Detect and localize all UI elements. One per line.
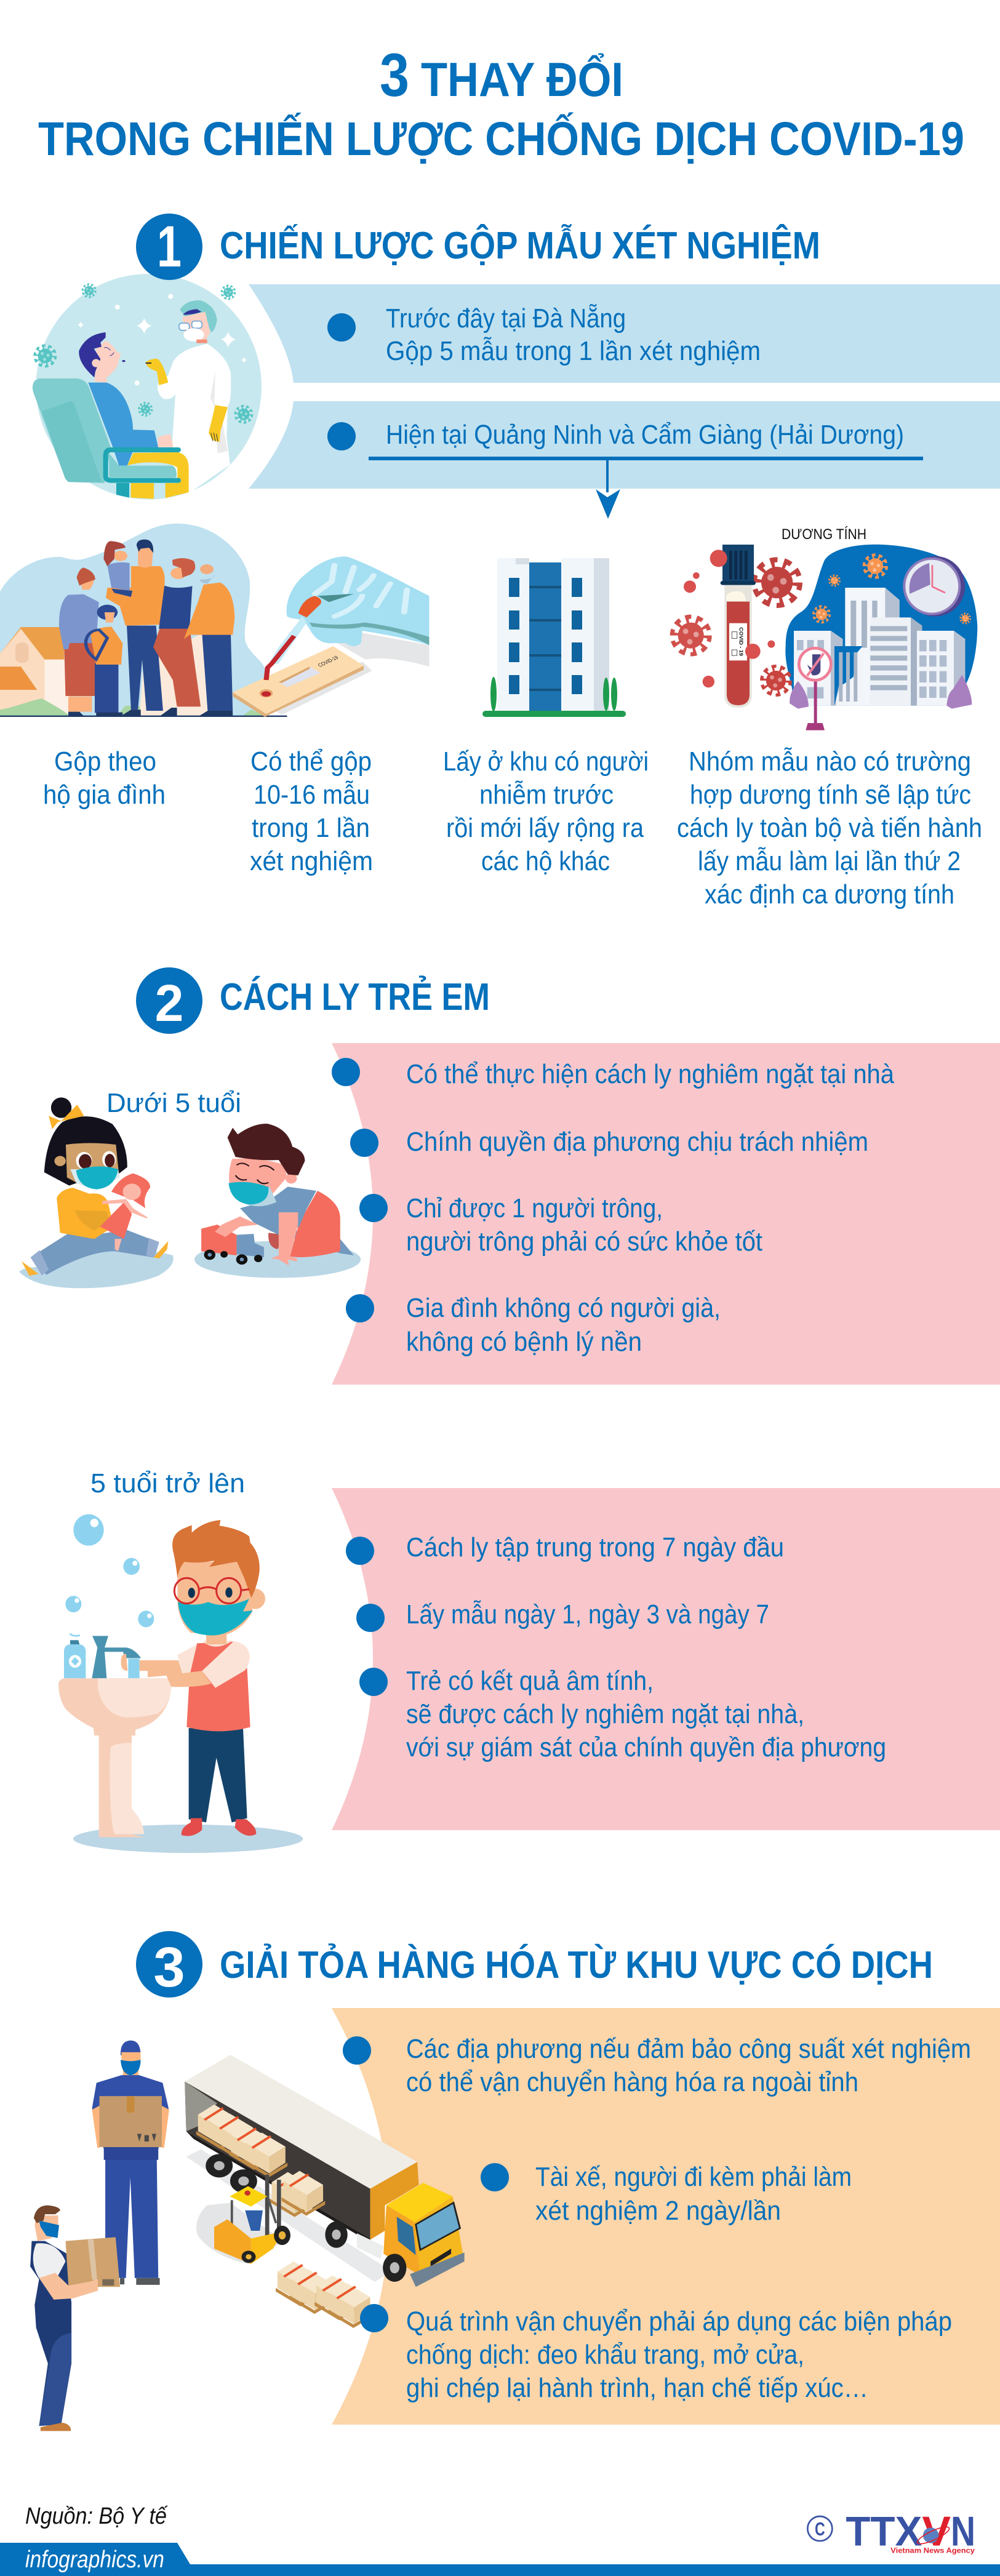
panel: under 5: Chỉ được 1 người trông,	[406, 1193, 663, 1223]
captions: pooling methods: 10-16 mẫu	[254, 780, 370, 810]
illustration: swab test	[33, 274, 262, 500]
panel: goods transport: chống dịch: đeo khẩu trang, mở cửa,	[406, 2340, 804, 2370]
captions: pooling methods: Nhóm mẫu nào có trường	[689, 746, 971, 777]
title: THAY ĐỔI	[421, 52, 623, 106]
captions: pooling methods: xác định ca dương tính	[705, 879, 954, 910]
illustration: apartment building	[482, 558, 626, 717]
panel: under 5: Có thể thực hiện cách ly nghiêm ngặt tại nhà	[406, 1059, 894, 1089]
heading 2: CÁCH LY TRẺ EM	[220, 976, 490, 1018]
logo: TTXVN: N	[951, 2509, 975, 2555]
title: 3	[380, 41, 409, 109]
illustration: workers and truck	[30, 2041, 465, 2431]
panel: under 5	[332, 1043, 1000, 1385]
number badge 1	[136, 214, 202, 280]
panel: 5 and up: với sự giám sát của chính quyền địa phương	[406, 1732, 886, 1762]
panel: before: Trước đây tại Đà Nẵng	[386, 303, 626, 334]
number badge 1: 1	[157, 214, 182, 279]
label: COVID-19 on kit: COVID-19	[317, 655, 340, 668]
captions: pooling methods: lấy mẫu làm lại lần thứ 2	[698, 846, 961, 876]
panel: before: Gộp 5 mẫu trong 1 lần xét nghiệm	[386, 336, 761, 366]
logo: TTXVN: Vietnam News Agency	[890, 2546, 975, 2554]
captions: pooling methods: trong 1 lần	[252, 813, 370, 843]
panel: 5 and up: Trẻ có kết quả âm tính,	[406, 1666, 654, 1696]
captions: pooling methods: nhiễm trước	[479, 780, 614, 810]
captions: pooling methods: xét nghiệm	[250, 846, 373, 876]
panel: goods transport: Quá trình vận chuyển phải áp dụng các biện pháp	[406, 2306, 952, 2337]
captions: pooling methods: các hộ khác	[481, 846, 610, 876]
panel: 5 and up: Lấy mẫu ngày 1, ngày 3 và ngày 7	[406, 1599, 769, 1630]
label: 5 years and up: 5 tuổi trở lên	[90, 1468, 245, 1498]
illustration: boy washing hands	[58, 1514, 303, 1853]
captions: pooling methods: Lấy ở khu có người	[443, 746, 649, 777]
number badge 3	[136, 1931, 202, 1999]
panel: 5 and up	[332, 1488, 1000, 1830]
captions: pooling methods: Gộp theo	[54, 746, 156, 777]
number badge 2	[136, 967, 202, 1034]
panel: goods transport: ghi chép lại hành trình, hạn chế tiếp xúc…	[406, 2373, 868, 2403]
title	[38, 41, 964, 166]
number badge 2: 2	[155, 974, 183, 1032]
arrow	[369, 457, 923, 519]
label: under 5 years: Dưới 5 tuổi	[106, 1088, 241, 1118]
label: COVID - 19 on tube: COVID - 19	[738, 627, 744, 656]
number badge 3: 3	[153, 1936, 185, 1999]
captions: pooling methods: hợp dương tính sẽ lập tức	[690, 780, 971, 810]
logo: TTXVN	[807, 2509, 975, 2555]
panel: 5 and up: Cách ly tập trung trong 7 ngày đầu	[406, 1532, 784, 1562]
panel: under 5: Chính quyền địa phương chịu trách nhiệm	[406, 1127, 868, 1157]
panel: under 5: người trông phải có sức khỏe tốt	[406, 1226, 762, 1257]
logo: TTXVN: C	[815, 2519, 825, 2540]
logo: TTXVN: V	[922, 2509, 951, 2555]
illustration: positive result	[672, 545, 977, 730]
illustration: family and test kit	[0, 524, 429, 717]
footer bar	[0, 2543, 1000, 2576]
captions: pooling methods: Có thể gộp	[250, 746, 372, 777]
bullet over crates	[360, 2304, 388, 2332]
panel: goods transport: có thể vận chuyển hàng hóa ra ngoài tỉnh	[406, 2067, 858, 2097]
panel: goods transport: xét nghiệm 2 ngày/lần	[535, 2196, 781, 2226]
panel: current	[249, 401, 1000, 489]
heading 1: CHIẾN LƯỢC GỘP MẪU XÉT NGHIỆM	[220, 225, 820, 267]
panel: under 5: không có bệnh lý nền	[406, 1327, 642, 1357]
panel: before	[249, 284, 1000, 383]
panel: goods transport	[332, 2008, 1000, 2425]
label: DƯƠNG TÍNH: DƯƠNG TÍNH	[782, 526, 866, 543]
captions: pooling methods: rồi mới lấy rộng ra	[446, 813, 644, 843]
panel: current: Hiện tại Quảng Ninh và Cẩm Giàng (Hải Dương)	[386, 420, 904, 450]
footer bar: infographics.vn	[25, 2546, 164, 2573]
illustration: toddlers	[19, 1097, 361, 1288]
captions: pooling methods: hộ gia đình	[43, 780, 166, 810]
panel: under 5: Gia đình không có người già,	[406, 1293, 721, 1323]
captions: pooling methods	[43, 746, 982, 910]
source: Nguồn: Bộ Y tế	[25, 2503, 169, 2529]
panel: goods transport: Tài xế, người đi kèm phải làm	[535, 2162, 852, 2192]
panel: 5 and up: sẽ được cách ly nghiêm ngặt tại nhà,	[406, 1699, 804, 1729]
logo: TTXVN: TTX	[846, 2509, 922, 2555]
